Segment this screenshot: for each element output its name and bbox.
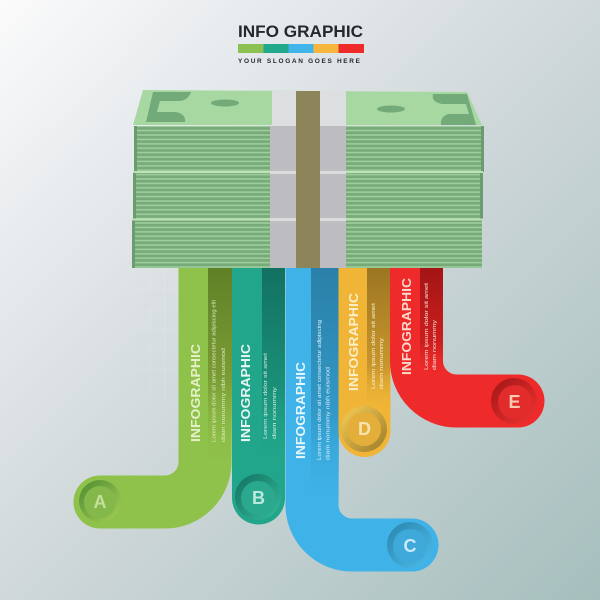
ribbon E [400, 262, 537, 424]
body B: diam nonummy [272, 387, 278, 439]
faint grid [135, 270, 235, 400]
ribbon E shaded half [420, 262, 443, 377]
stack edges [132, 126, 484, 268]
body A: diam nonummy nibh euismod [221, 348, 227, 442]
circle D: D [358, 419, 371, 439]
body C: diam nonummy nibh euismod [326, 367, 332, 460]
label D: INFOGRAPHIC [347, 293, 361, 391]
label C: INFOGRAPHIC [294, 362, 308, 459]
stack 3 [132, 220, 482, 268]
circle E [491, 378, 537, 424]
circle A: A [94, 492, 106, 512]
ribbon D [341, 262, 390, 452]
body A: Lorem ipsum dolor sit amet consectetur adipiscing elit [212, 299, 218, 442]
ribbon A shaded half [208, 262, 232, 472]
body B: Lorem ipsum dolor sit amet [263, 352, 269, 439]
ribbon B shaded half [262, 262, 285, 472]
circle C [387, 522, 433, 568]
body A [212, 299, 227, 442]
label B: INFOGRAPHIC [239, 344, 253, 442]
circle B: B [252, 488, 265, 508]
body B [263, 352, 278, 439]
top bill [133, 90, 482, 125]
stack 2 [133, 172, 483, 219]
paper band [270, 91, 346, 268]
ribbon B [235, 262, 285, 520]
circle D [341, 406, 387, 452]
slogan: YOUR SLOGAN GOES HERE [238, 58, 361, 65]
body D: Lorem ipsum dolor sit amet [371, 302, 377, 389]
ribbon D shaded half [367, 262, 390, 412]
colour bar [238, 44, 364, 53]
body E: Lorem ipsum dolor sit amet [424, 282, 430, 370]
money stack [132, 90, 484, 268]
ribbon C [294, 262, 433, 568]
circle C: C [404, 536, 416, 556]
label E: INFOGRAPHIC [400, 278, 414, 375]
stack 1 [134, 126, 484, 172]
body E: diam nonummy [432, 320, 438, 370]
body C [317, 320, 332, 460]
ribbon C shaded half [311, 262, 339, 512]
label A: INFOGRAPHIC [189, 344, 203, 442]
stack separators [132, 171, 483, 220]
circle E: E [508, 392, 521, 412]
circle A [79, 480, 121, 522]
body E [424, 282, 438, 370]
body C: Lorem ipsum dolor sit amet consectetur adipiscing [317, 320, 323, 460]
title: INFO GRAPHIC [238, 23, 363, 41]
body D: diam nonummy [379, 338, 385, 389]
circle B [235, 474, 281, 520]
body D [371, 302, 385, 389]
title block [238, 23, 364, 65]
ribbon A [79, 262, 232, 522]
